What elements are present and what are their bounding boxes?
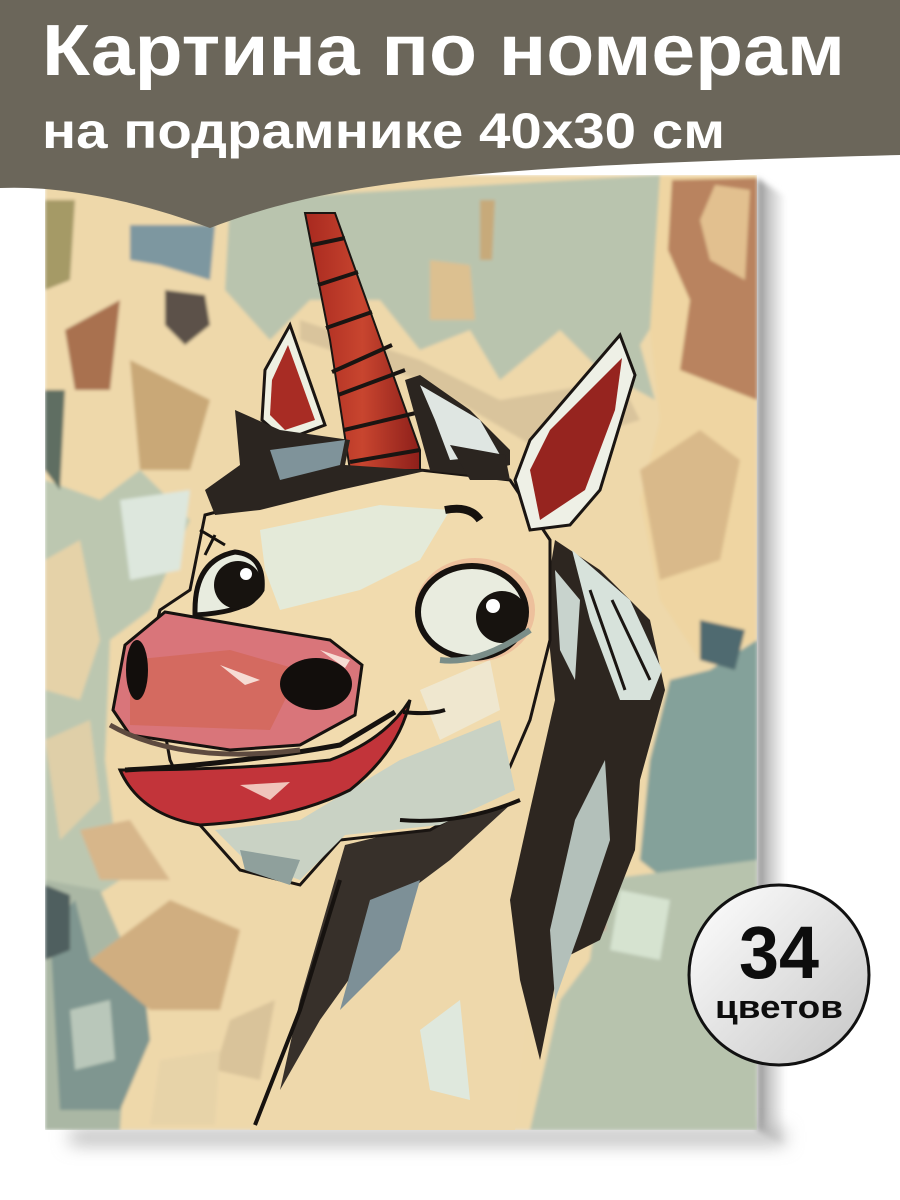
canvas shadow — [70, 178, 785, 1145]
forelock — [205, 375, 510, 515]
header banner — [0, 0, 900, 228]
badge: 34 colours: 34 — [739, 911, 819, 994]
left ear — [262, 325, 325, 440]
horn — [305, 213, 420, 470]
painted background — [45, 175, 757, 1130]
right ear — [515, 335, 635, 530]
badge: 34 colours: цветов — [715, 989, 843, 1025]
mane — [510, 540, 665, 1060]
head — [150, 470, 550, 885]
badge: 34 colours — [689, 885, 869, 1065]
subtitle: на подрамнике 40х30 см — [42, 103, 725, 159]
painting: unicorn on the canvas — [45, 175, 757, 1130]
nose — [113, 612, 362, 750]
mouth — [110, 700, 445, 825]
left eye — [195, 530, 262, 615]
title: Картина по номерам — [42, 11, 845, 91]
right eye — [415, 509, 535, 662]
neck — [250, 806, 515, 1130]
